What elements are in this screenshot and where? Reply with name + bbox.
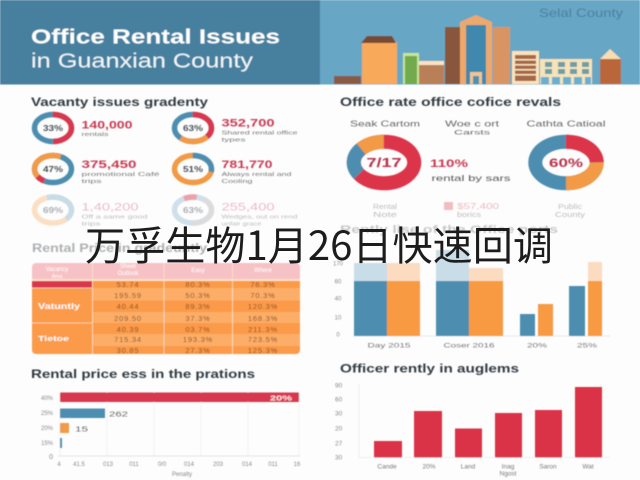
labels above donuts: Woe c ort [445, 120, 500, 128]
faded heading: monthly: Rently lise of the Office ports [340, 224, 558, 236]
bar chart: rental price: 0 [49, 454, 53, 461]
table: rental price: 50.3% [185, 291, 211, 300]
table: rental price: Tietoe [38, 334, 69, 343]
bar chart: officer rently: Wat [582, 464, 594, 470]
faded labels below donuts: Public [558, 204, 583, 211]
stat 4: 781,770 [222, 159, 272, 171]
table: rental price: 27.3% [185, 346, 211, 355]
bar chart: rental price: 41.5 [73, 462, 85, 468]
bar chart: rental price: 25% [41, 411, 54, 417]
stat 1: 140,000 [82, 120, 132, 132]
table: rental price: 168.3% [248, 314, 278, 323]
faded labels below donuts: County [555, 212, 586, 219]
donut 4 [174, 156, 212, 182]
overlay caption: 万孚生物1月26日快速回调 [85, 214, 553, 272]
callout: center rate: rental by sars [432, 173, 510, 183]
callout: center rate: 110% [430, 158, 468, 170]
stacked bar chart: 0 [336, 332, 340, 338]
donut 5 [34, 197, 72, 223]
panel: vacancy issues [31, 95, 298, 228]
table: rental price: 723.5% [248, 335, 278, 344]
stat 3: trips [82, 179, 102, 185]
stat 5: Off a same good [82, 214, 148, 220]
stat 1 [82, 120, 132, 138]
bar chart: rental price: 20% [270, 396, 293, 402]
heading: rental price bars: Rental price ess in the prations [31, 367, 255, 381]
table: rental price: 80.3% [185, 280, 211, 289]
bar chart: officer rently: Inag [502, 464, 515, 470]
stat 1: rentals [82, 132, 109, 138]
stat 3: promotional Café [82, 172, 160, 178]
table: rental price: Vatuntly [38, 302, 81, 311]
table: rental price: Easy [191, 268, 205, 274]
stat 2: 352,700 [222, 118, 274, 130]
stat 6: unfair grace [222, 222, 262, 228]
table: rental price: Outlook [118, 271, 139, 277]
table: rental price: 120.3% [248, 302, 278, 311]
donut 1: 33% [43, 123, 64, 133]
bar chart: rental price: 16 [294, 462, 301, 468]
bar chart: rental price: 4 [57, 462, 61, 468]
donut: right [535, 142, 597, 183]
donut 1 [34, 114, 72, 142]
donut 4: 51% [183, 164, 204, 174]
table: rental price: 70.3% [250, 291, 276, 300]
table: rental price: 30.85 [117, 346, 139, 355]
faded heading: rental price: Rental Price in gradeuntly [32, 241, 207, 255]
table: rental price: 53.74 [117, 280, 139, 289]
stat 5: trips [82, 222, 101, 228]
stat 6 [222, 202, 298, 228]
stat 2: Shared rental office [222, 130, 298, 136]
heading: officer rently: Officer rently in auglems [340, 362, 519, 376]
bar chart: officer rently: 90 [335, 382, 343, 390]
bar chart: officer rently: 60 [335, 396, 343, 404]
labels above donuts: Cathta Catioal [526, 120, 606, 128]
bar chart: rental price: Penalty [172, 472, 192, 478]
bar chart: rental price: 0/0 [158, 462, 167, 468]
bar chart: officer rently [335, 362, 610, 478]
title: in Guanxian County [31, 50, 253, 72]
bar chart: officer rently: Ngost [500, 470, 517, 478]
donut 6 [174, 197, 212, 223]
bar chart: officer rently: 27 [335, 440, 343, 448]
title: Office Rental Issues [31, 26, 280, 48]
stacked bar chart: 60 [335, 280, 342, 286]
stat 4 [222, 159, 292, 185]
faded labels below donuts: borics [457, 212, 482, 219]
bar chart: rental price: 15% [41, 441, 54, 447]
table: rental price: Vacancy [46, 267, 68, 273]
stat 3: 375,450 [82, 159, 136, 171]
stacked bar chart: Coser 2016 [444, 342, 495, 350]
table: rental price: Sheet [120, 264, 136, 270]
table: rental price: 715.34 [114, 335, 142, 344]
stat 6: Wedges, out on rend [222, 214, 298, 220]
bar chart: rental price: 40% [41, 396, 54, 402]
table: rental price: 193.3% [183, 335, 213, 344]
table: rental price: 03.7% [185, 325, 211, 334]
bar chart: officer rently: 20% [422, 464, 436, 470]
table: rental price: Area [52, 274, 62, 280]
donut 5: 69% [43, 205, 64, 215]
bar chart: rental price: 262 [109, 410, 128, 418]
bar chart: rental price: 014 [242, 462, 253, 468]
title [31, 26, 280, 72]
bar chart: rental price: 014 [184, 462, 195, 468]
bar chart: officer rently: 20 [335, 426, 343, 432]
table: rental price: 209.50 [114, 314, 142, 323]
stat 5 [82, 202, 148, 228]
header banner [0, 0, 640, 84]
stacked bar chart: 170 [333, 262, 344, 268]
stat 4: Cooling [222, 179, 252, 185]
county label: Selal County [539, 6, 623, 20]
bar chart: officer rently: 30 [335, 454, 343, 462]
table: rental price: Where [254, 268, 272, 274]
labels above donuts: Seak Cartom [350, 120, 420, 128]
bar chart: rental price [31, 367, 301, 478]
table: rental price: 195.59 [114, 291, 142, 300]
stat 5: 1,40,200 [82, 202, 138, 214]
donut 2 [174, 114, 212, 142]
donut: left [354, 142, 414, 183]
faded labels below donuts [373, 202, 586, 219]
bar chart: rental price: 20% [41, 426, 54, 432]
bar chart: officer rently: Saron [539, 464, 557, 470]
illustration: city skyline [334, 15, 621, 84]
bar chart: rental price: 011 [268, 462, 278, 468]
donut: left: 7/17 [366, 156, 402, 170]
table: rental price: 211.3% [248, 325, 278, 334]
table: rental price [32, 263, 300, 355]
table: rental price: 40.44 [117, 302, 139, 311]
donut 6: 63% [183, 205, 204, 215]
stat 3 [82, 159, 160, 185]
stacked bar chart: 20% [527, 342, 547, 350]
bar chart: rental price: 203 [213, 462, 224, 468]
stacked bar chart: Day 2015 [368, 342, 411, 350]
stat 2 [222, 118, 298, 144]
table: rental price: 37.3% [185, 314, 211, 323]
panel: office rate [340, 95, 606, 219]
faded labels below donuts: Note [373, 212, 397, 219]
heading: vacancy issues: Vacanty issues gradenty [31, 95, 208, 109]
stacked bar chart: 40 [335, 296, 342, 302]
stat 6: 255,400 [222, 202, 274, 214]
table: rental price: 125.3% [248, 346, 278, 355]
stat 4: Always rental and [222, 172, 292, 178]
table: rental price: 89.3% [185, 302, 211, 311]
labels above donuts: Carsts [454, 130, 491, 136]
bar chart: officer rently: Cande [377, 464, 397, 470]
bar chart: rental price: 011 [129, 462, 139, 468]
faded labels below donuts: $57,400 [457, 202, 500, 211]
bar chart: rental price: 013 [103, 462, 114, 468]
table: rental price: 40.39 [117, 325, 139, 334]
stacked bar chart: 10 [335, 316, 342, 322]
faded labels below donuts: Rental [373, 204, 398, 211]
donut 2: 63% [183, 123, 204, 133]
callout: center rate [430, 158, 510, 183]
stacked bar chart [333, 250, 610, 350]
donut 3 [34, 156, 72, 182]
donut: right: 60% [549, 156, 583, 170]
table: rental price: 76.3% [250, 280, 276, 289]
stat 2: types [222, 138, 246, 144]
stacked bar chart: 25% [577, 342, 597, 350]
donut 3: 47% [43, 164, 64, 174]
bar chart: officer rently: 30 [335, 410, 343, 418]
labels above donuts [350, 120, 606, 136]
bar chart: rental price: 15 [75, 424, 88, 434]
heading: office rate: Office rate office cofice revals [340, 95, 561, 109]
bar chart: officer rently: Land [461, 464, 476, 470]
